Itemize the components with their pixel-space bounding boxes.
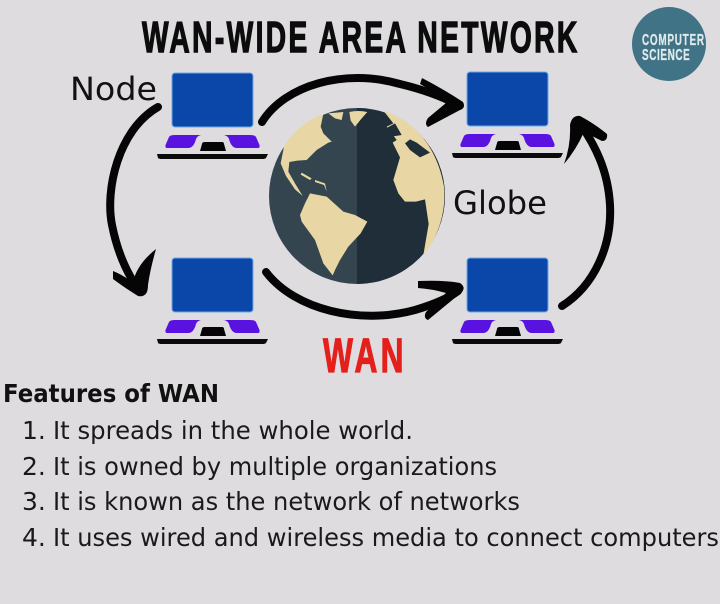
list: features: [22, 416, 719, 552]
icon: globe: [269, 108, 445, 284]
arrow: bottom left to bottom right: [266, 272, 464, 320]
title: WAN-WIDE AREA NETWORK: [142, 13, 577, 62]
badge: computer science: SCIENCE: [642, 46, 690, 64]
label: wan: WAN: [323, 328, 404, 383]
label: globe: Globe: [453, 184, 547, 222]
list: features: It is known as the network of networks: [53, 487, 520, 516]
arrow: top left to bottom left: [110, 107, 158, 296]
icon: laptop top right: [452, 72, 563, 158]
arrow: top left to top right: [262, 78, 464, 127]
list: features: 1.: [22, 416, 46, 445]
heading: features of wan: Features of WAN: [3, 379, 219, 408]
list: features: It is owned by multiple organizations: [53, 452, 497, 481]
arrow: bottom right to top right: [562, 116, 610, 306]
list: features: 3.: [22, 487, 46, 516]
list: features: It spreads in the whole world.: [53, 416, 413, 445]
list: features: 4.: [22, 523, 46, 552]
label: node: Node: [70, 70, 157, 108]
badge: computer science: COMPUTER: [642, 31, 704, 49]
list: features: 2.: [22, 452, 46, 481]
badge: computer science: [632, 7, 706, 81]
icon: laptop bottom left: [157, 258, 268, 344]
icon: laptop bottom right: [452, 258, 563, 344]
icon: laptop top left: [157, 73, 268, 159]
